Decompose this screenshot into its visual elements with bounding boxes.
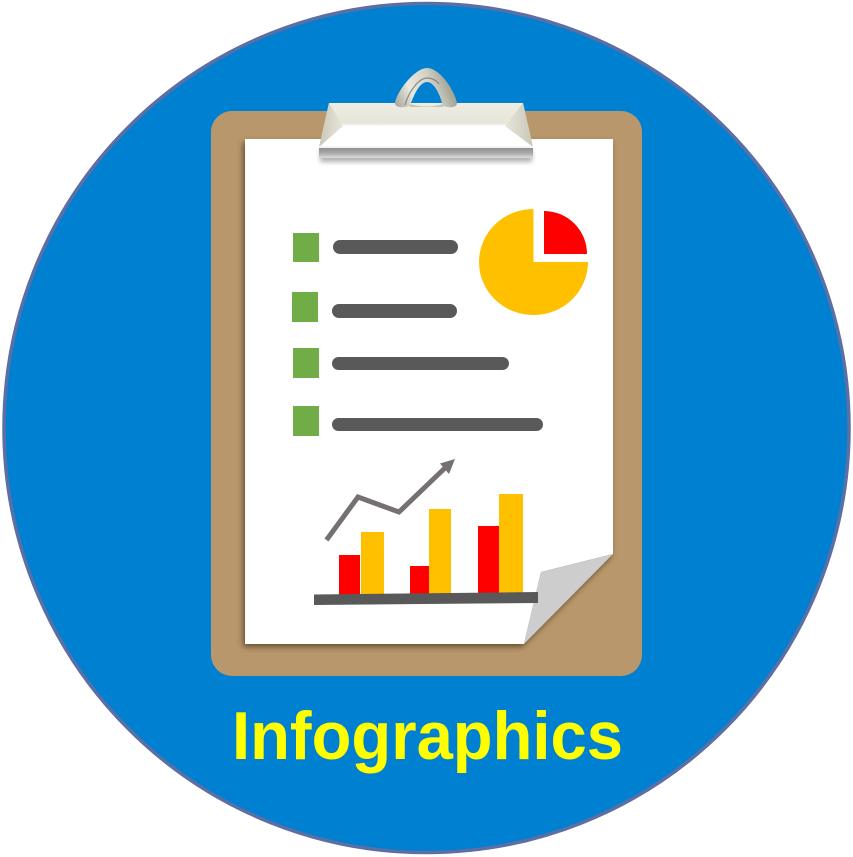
clip left bevel bbox=[319, 103, 343, 147]
chart baseline bbox=[314, 592, 538, 605]
bars: group 3 bbox=[478, 494, 523, 594]
bars: group 1 bbox=[339, 532, 384, 595]
clipboard board bbox=[211, 111, 642, 676]
folded corner bbox=[524, 554, 613, 644]
trend arrow bbox=[326, 459, 455, 540]
clip right bevel bbox=[505, 103, 533, 147]
list item 1 bbox=[293, 233, 458, 262]
list item 4 bbox=[293, 406, 543, 436]
clip lip bbox=[319, 148, 533, 158]
title: Infographics bbox=[232, 698, 623, 774]
clip face bbox=[319, 103, 533, 148]
bars: group 2 bbox=[410, 509, 451, 595]
paper shadow bbox=[243, 142, 611, 647]
paper sheet bbox=[245, 139, 613, 644]
pie chart bbox=[479, 209, 588, 315]
list item 2 bbox=[292, 292, 457, 322]
clip ring bbox=[395, 68, 457, 107]
list item 3 bbox=[293, 348, 509, 378]
clip shadow bbox=[320, 150, 532, 162]
bar chart with trend arrow bbox=[314, 459, 538, 605]
clip bbox=[319, 68, 533, 162]
clip bottom edge bbox=[319, 146, 533, 148]
